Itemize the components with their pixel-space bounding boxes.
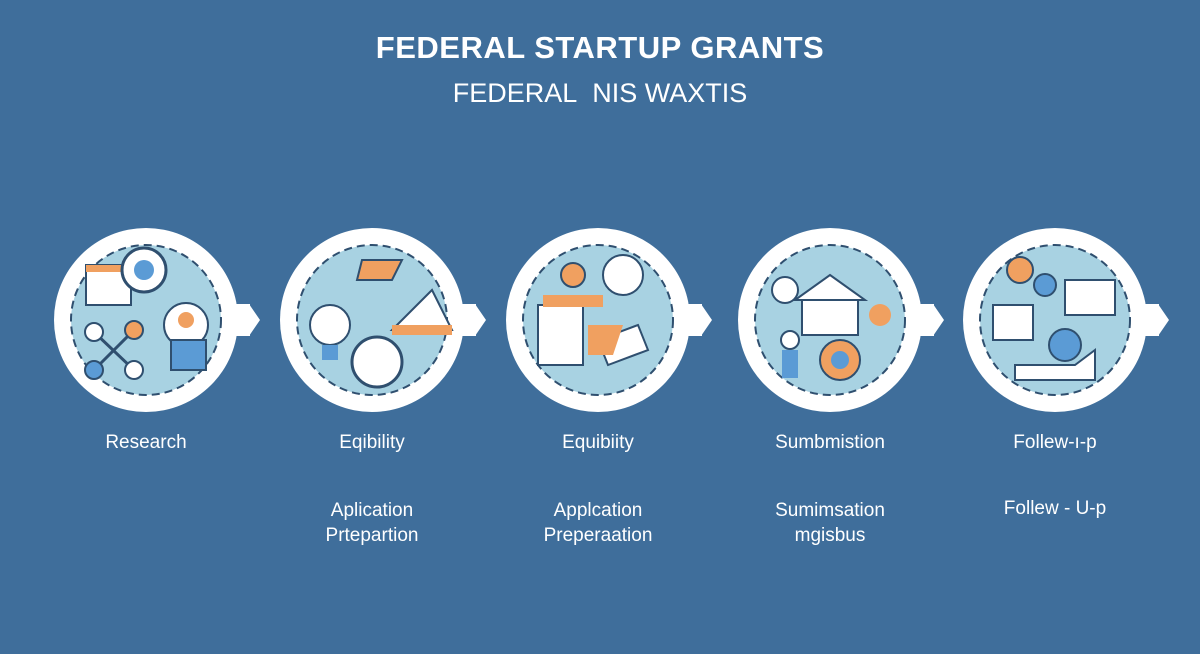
label: submission 2: Sumimsation (775, 500, 885, 521)
step 5: follow-up icon (963, 228, 1169, 412)
label: application preparation 1: Prtepartion (326, 525, 418, 546)
step 1: research icon (54, 228, 260, 412)
label: application preparation 2: Preperaation (544, 525, 652, 546)
label: eligibility: Eqibility (339, 432, 405, 453)
label: application preparation 2 (544, 500, 652, 546)
label: follow-up 2: Follew - U-p (1004, 498, 1106, 519)
label: follow-up: Follew-ı-p (1013, 432, 1097, 453)
label: submission: Sumbmistion (775, 432, 885, 453)
step 2: eligibility icon (280, 228, 486, 412)
label: application preparation 1 (326, 500, 418, 546)
subtitle: FEDERAL NIS WAXTIS (453, 78, 747, 108)
label: research: Research (105, 432, 187, 453)
label: submission 2: mgisbus (795, 525, 865, 546)
label: application preparation 2: Applcation (554, 500, 642, 521)
label: application preparation 1: Aplication (331, 500, 413, 521)
step 3: application icon (506, 228, 712, 412)
label: submission 2 (775, 500, 885, 546)
label: eligibility 2: Equibiity (562, 432, 634, 453)
step 4: submission icon (738, 228, 944, 412)
title: FEDERAL STARTUP GRANTS (376, 30, 824, 65)
